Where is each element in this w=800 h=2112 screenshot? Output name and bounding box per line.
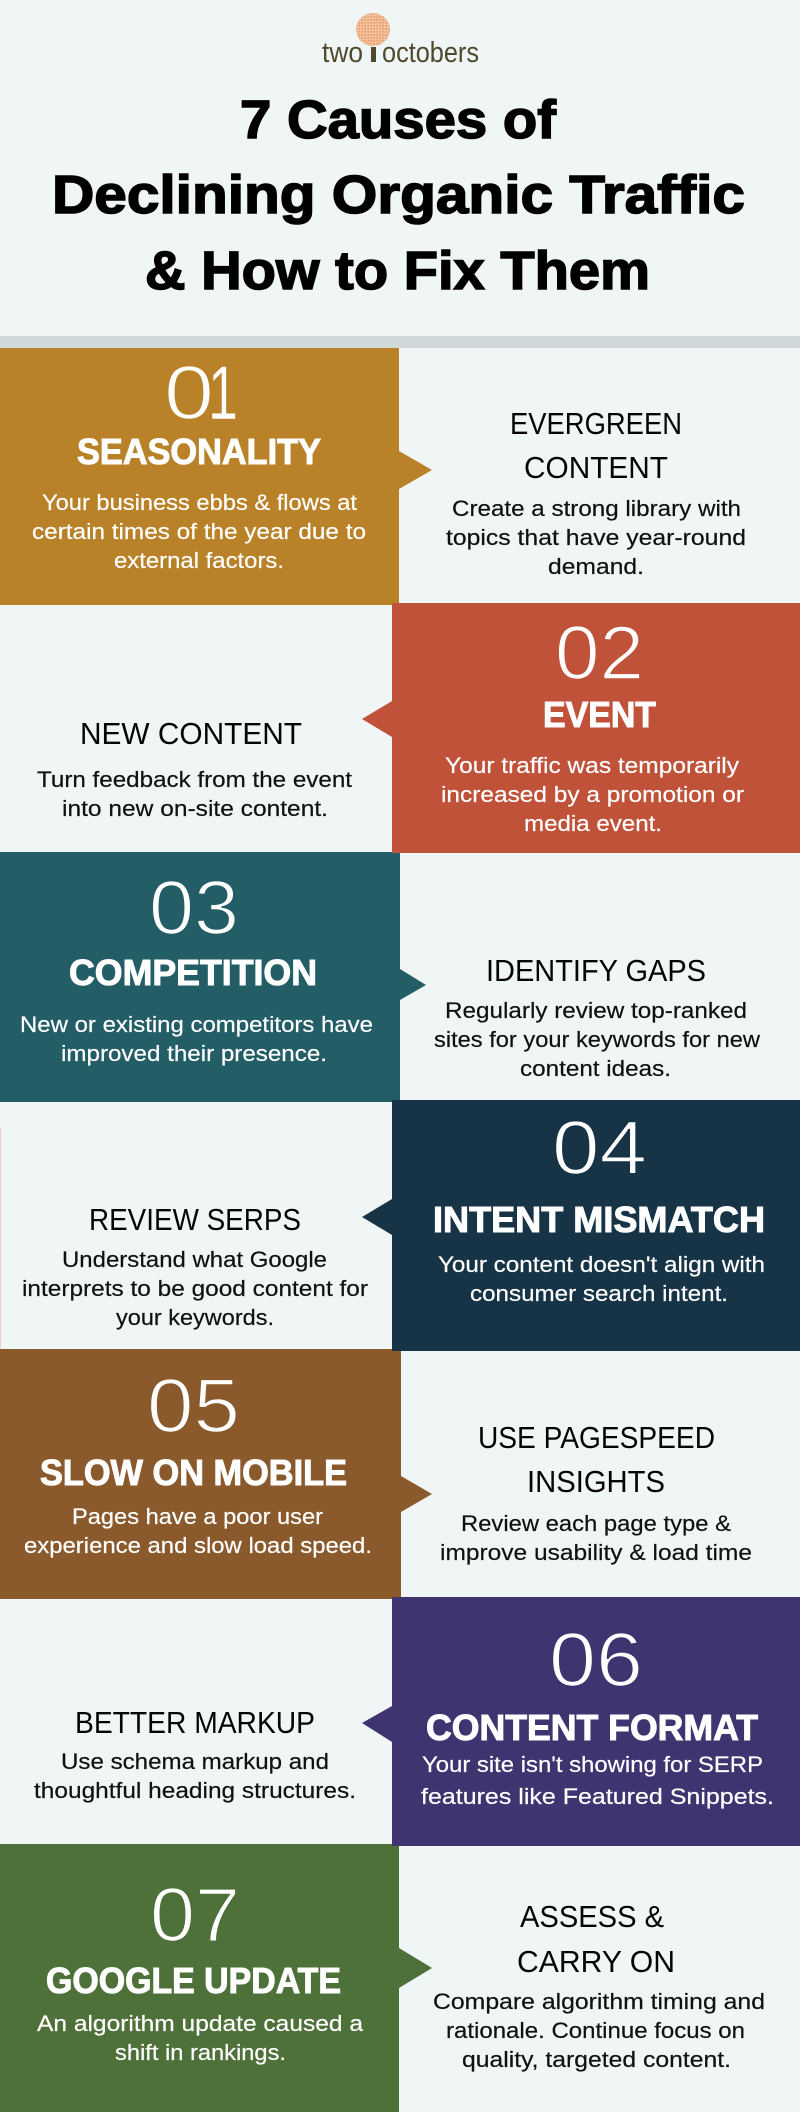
panel: fix evergreen content [446, 406, 746, 579]
heading: identify gaps: IDENTIFY GAPS [486, 953, 706, 988]
heading: use pagespeed insights: USE PAGESPEED [478, 1420, 715, 1455]
description [20, 1012, 373, 1066]
heading: evergreen content [510, 406, 682, 485]
panel: fix assess and carry on [433, 1899, 765, 2072]
description: New or existing competitors have [20, 1012, 373, 1037]
panel: cause 06 content format [362, 1597, 800, 1846]
heading: better markup: BETTER MARKUP [75, 1705, 315, 1740]
fix text: Understand what Google [62, 1247, 327, 1272]
fix text: quality, targeted content. [462, 2047, 731, 2072]
description [32, 490, 366, 573]
panel: fix identify gaps [434, 953, 760, 1081]
heading: review serps: REVIEW SERPS [89, 1202, 301, 1237]
panel: cause 05 slow on mobile [0, 1349, 432, 1599]
description: media event. [524, 811, 662, 836]
description: features like Featured Snippets. [421, 1784, 774, 1809]
description: Your business ebbs & flows at [42, 490, 357, 515]
fix text [37, 767, 352, 821]
description: Pages have a poor user [72, 1504, 323, 1529]
panel: cause 01 seasonality [0, 348, 432, 605]
panel: fix better markup [34, 1705, 356, 1803]
fix text [446, 496, 746, 579]
fix text [22, 1247, 368, 1330]
number 03: 03 [149, 866, 239, 951]
description: shift in rankings. [115, 2040, 286, 2065]
heading: google update: GOOGLE UPDATE [46, 1960, 341, 2001]
description: increased by a promotion or [441, 782, 744, 807]
description: external factors. [114, 548, 284, 573]
heading: use pagespeed insights [478, 1420, 715, 1499]
heading: seasonality: SEASONALITY [77, 431, 321, 472]
number 06: 06 [549, 1618, 643, 1703]
number 01 [164, 351, 238, 436]
heading: assess and carry on: CARRY ON [517, 1944, 675, 1979]
number 01: 1 [208, 351, 238, 436]
fix text [34, 1749, 356, 1803]
fix text: your keywords. [116, 1305, 274, 1330]
logo wordmark: two [322, 37, 363, 69]
heading: intent mismatch: INTENT MISMATCH [433, 1199, 765, 1240]
panel: cause 04 intent mismatch [362, 1100, 800, 1351]
fix text: Create a strong library with [452, 496, 741, 521]
panel: cause 03 competition [0, 852, 426, 1102]
fix text: improve usability & load time [440, 1540, 752, 1565]
heading: content format: CONTENT FORMAT [426, 1707, 758, 1748]
number 01: 0 [164, 351, 214, 436]
fix text: into new on-site content. [62, 796, 328, 821]
header divider band [0, 336, 800, 348]
number 07: 07 [150, 1873, 240, 1958]
logo wordmark [322, 37, 479, 69]
heading: event: EVENT [543, 694, 656, 735]
panel: fix use pagespeed insights [440, 1420, 752, 1565]
fix text: Review each page type & [461, 1511, 731, 1536]
number 05: 05 [147, 1364, 240, 1449]
heading: slow on mobile: SLOW ON MOBILE [40, 1452, 347, 1493]
title: 7 Causes of [240, 90, 557, 150]
description: Your traffic was temporarily [445, 753, 739, 778]
heading: evergreen content: EVERGREEN [510, 406, 682, 441]
logo: two octobers [322, 13, 479, 69]
fix text: interprets to be good content for [22, 1276, 368, 1301]
description: improved their presence. [61, 1041, 327, 1066]
description [24, 1504, 372, 1558]
panel: fix new content [37, 716, 352, 821]
description [421, 1752, 774, 1809]
title [52, 90, 745, 301]
number 02: 02 [555, 611, 644, 696]
fix text: thoughtful heading structures. [34, 1778, 356, 1803]
heading: new content: NEW CONTENT [80, 716, 302, 751]
fix text: Compare algorithm timing and [433, 1989, 765, 2014]
fix text [434, 998, 760, 1081]
description: consumer search intent. [470, 1281, 728, 1306]
heading: assess and carry on [517, 1899, 675, 1979]
description: Your content doesn't align with [438, 1252, 765, 1277]
fix text [440, 1511, 752, 1565]
description: experience and slow load speed. [24, 1533, 372, 1558]
heading: evergreen content: CONTENT [524, 450, 668, 485]
description: Your site isn't showing for SERP [422, 1752, 763, 1777]
heading: competition: COMPETITION [69, 952, 317, 993]
panel: cause 07 google update [0, 1844, 432, 2112]
number 04: 04 [552, 1106, 647, 1191]
fix text: sites for your keywords for new [434, 1027, 760, 1052]
fix text: Use schema markup and [61, 1749, 329, 1774]
fix text: content ideas. [520, 1056, 671, 1081]
fix text: Regularly review top-ranked [445, 998, 747, 1023]
fix text: demand. [548, 554, 644, 579]
description [37, 2011, 364, 2065]
panel: cause 02 event [362, 603, 800, 853]
description [441, 753, 744, 836]
title: & How to Fix Them [145, 241, 650, 301]
fix text: Turn feedback from the event [37, 767, 352, 792]
icon: fingerprint circle [356, 13, 390, 46]
description: certain times of the year due to [32, 519, 366, 544]
fix text: rationale. Continue focus on [446, 2018, 745, 2043]
description: An algorithm update caused a [37, 2011, 364, 2036]
fix text [433, 1989, 765, 2072]
heading: assess and carry on: ASSESS & [520, 1899, 664, 1934]
fix text: topics that have year-round [446, 525, 746, 550]
title: Declining Organic Traffic [52, 165, 745, 225]
heading: use pagespeed insights: INSIGHTS [527, 1464, 665, 1499]
description [438, 1252, 765, 1306]
panel: fix review serps [0, 1128, 368, 1349]
logo wordmark: octobers [382, 37, 479, 69]
